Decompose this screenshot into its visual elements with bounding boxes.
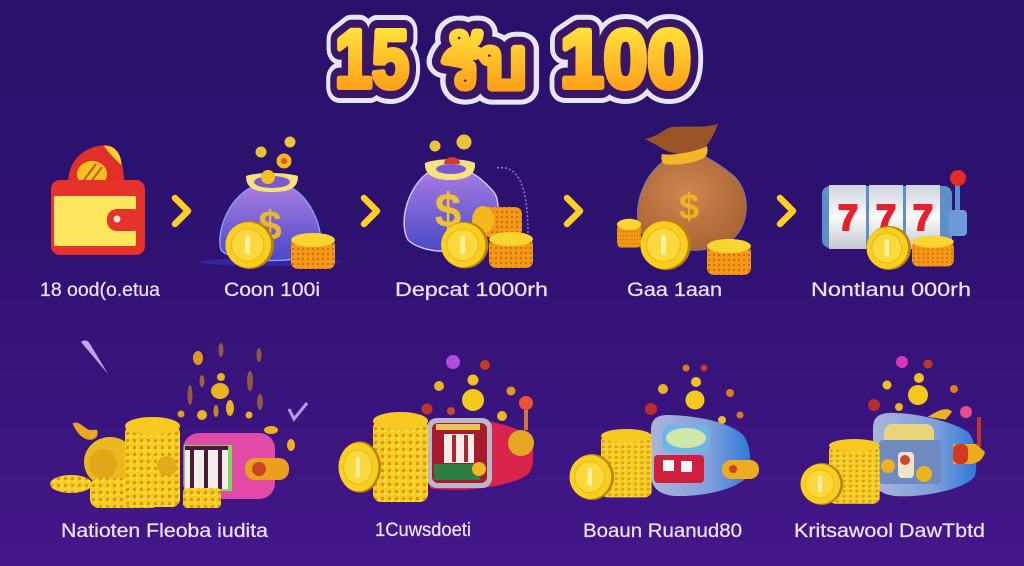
arrow 1 bbox=[175, 198, 188, 224]
label: bonus 2: 1Cuwsdoeti bbox=[375, 520, 471, 541]
scene: red slot machine with coins bbox=[338, 355, 534, 502]
title bbox=[335, 14, 691, 105]
icon: deposit bag: $ bbox=[435, 185, 462, 238]
icon: purple coin bag bbox=[200, 136, 340, 269]
icon: brown money bag bbox=[617, 124, 751, 275]
arrow 2 bbox=[364, 198, 377, 224]
scene: blue slot machine with coins bbox=[569, 364, 759, 500]
icon: 777 slot machine: 7 bbox=[876, 197, 896, 238]
arrow 3 bbox=[567, 198, 580, 224]
arrow 4 bbox=[780, 198, 793, 224]
icon: 777 slot machine: 7 bbox=[838, 197, 858, 238]
label: step 5: Nontlanu 000rh bbox=[811, 280, 971, 301]
label: step 1: 18 ood(o.etua bbox=[40, 280, 160, 301]
label: bonus 3: Boaun Ruanud80 bbox=[583, 521, 742, 542]
label: bonus 4: Kritsawool DawTbtd bbox=[794, 521, 985, 542]
title: รับ bbox=[441, 26, 526, 102]
title: 15 bbox=[335, 14, 409, 105]
icon: wallet bbox=[51, 145, 145, 255]
label: step 2: Coon 100i bbox=[224, 280, 320, 301]
title: รับ bbox=[441, 26, 526, 102]
icon: 777 slot machine: 7 bbox=[913, 197, 933, 238]
title: 100 bbox=[560, 14, 691, 105]
icon: brown money bag: $ bbox=[679, 186, 699, 227]
scene: grey-blue slot machine with coins bbox=[800, 356, 985, 505]
title: 15 bbox=[335, 14, 409, 105]
icon: purple coin bag: $ bbox=[258, 202, 282, 249]
label: step 4: Gaa 1aan bbox=[627, 280, 722, 301]
scene: pink machine with gold coins bbox=[50, 343, 295, 508]
title: 100 bbox=[560, 14, 691, 105]
label: bonus 1: Natioten Fleoba iudita bbox=[61, 521, 268, 542]
title: รับ bbox=[441, 26, 526, 102]
icon: 777 slot machine bbox=[822, 170, 967, 270]
icon: purple wedge bbox=[81, 340, 108, 374]
title: 15 bbox=[335, 14, 409, 105]
icon: check mark bbox=[289, 403, 307, 419]
title: 100 bbox=[560, 14, 691, 105]
label: step 3: Depcat 1000rh bbox=[395, 280, 548, 301]
icon: deposit bag bbox=[404, 134, 533, 268]
